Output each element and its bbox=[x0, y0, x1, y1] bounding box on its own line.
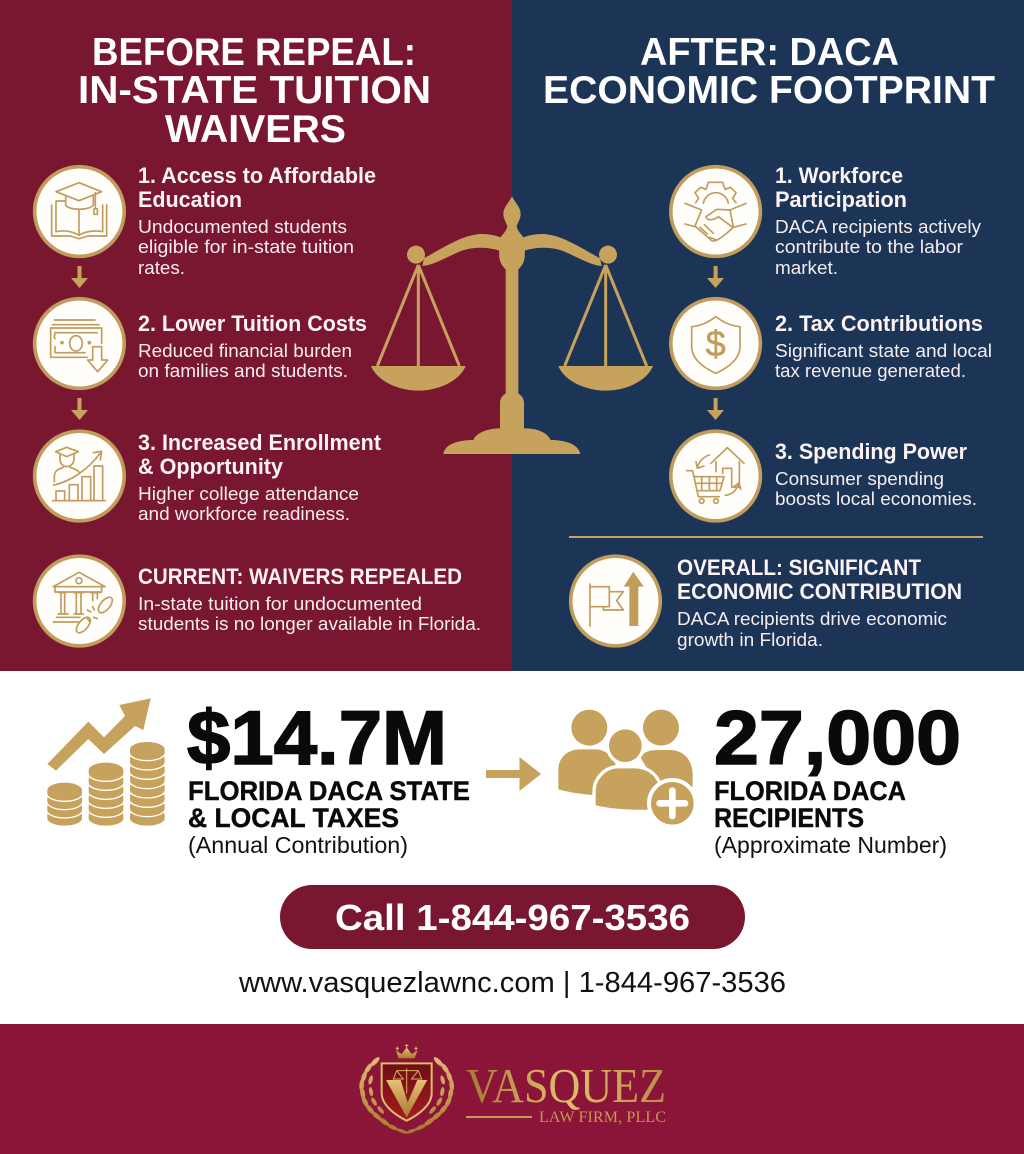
text: tax contributions: 2. Tax Contributions bbox=[775, 311, 983, 336]
text: access to affordable education: eligible for in-state tuition bbox=[138, 237, 354, 257]
text: spending power: 3. Spending Power bbox=[775, 439, 967, 464]
stat: tax contribution bbox=[187, 696, 470, 858]
text: current waivers repealed: CURRENT: WAIVERS REPEALED bbox=[138, 564, 462, 589]
text: access to affordable education: Education bbox=[138, 187, 242, 212]
text: lower tuition costs bbox=[138, 311, 367, 381]
text: tax contributions: Significant state and local bbox=[775, 341, 992, 361]
icon: group of people with plus bbox=[558, 710, 696, 827]
arrow: down bbox=[71, 398, 88, 420]
text: workforce participation: contribute to the labor bbox=[775, 237, 963, 257]
icon: shield with dollar: $ bbox=[706, 323, 726, 364]
text: increased enrollment and opportunity: Higher college attendance bbox=[138, 484, 359, 504]
text: overall economic contribution: growth in Florida. bbox=[677, 630, 823, 650]
text: lower tuition costs: 2. Lower Tuition Costs bbox=[138, 311, 367, 336]
stat: tax contribution: FLORIDA DACA STATE bbox=[188, 776, 470, 806]
stat: tax contribution: & LOCAL TAXES bbox=[188, 803, 399, 833]
text: increased enrollment and opportunity: 3. Increased Enrollment bbox=[138, 430, 382, 455]
icon: courthouse and broken chain bbox=[35, 556, 124, 646]
text: spending power: Consumer spending bbox=[775, 469, 944, 489]
stat: tax contribution: (Annual Contribution) bbox=[188, 832, 408, 858]
text: overall economic contribution: ECONOMIC CONTRIBUTION bbox=[677, 579, 962, 604]
heading: before repeal: IN-STATE TUITION bbox=[78, 69, 431, 112]
text: tax contributions bbox=[775, 311, 992, 381]
logo: Vasquez Law Firm bbox=[359, 1044, 666, 1135]
icon: scales of justice bbox=[371, 196, 653, 454]
panel: footer bbox=[0, 1024, 1024, 1154]
text: lower tuition costs: on families and students. bbox=[138, 361, 348, 381]
icon: shield with dollar bbox=[671, 299, 760, 388]
text: overall economic contribution bbox=[677, 555, 962, 650]
stat: recipients: RECIPIENTS bbox=[714, 803, 864, 833]
icon: coin stacks with rising arrow bbox=[47, 698, 165, 826]
panel: before repeal bbox=[0, 0, 512, 671]
heading: before repeal bbox=[78, 31, 431, 151]
text: workforce participation: DACA recipients actively bbox=[775, 217, 981, 237]
button: call bbox=[280, 885, 745, 949]
text: workforce participation: Participation bbox=[775, 187, 907, 212]
text: increased enrollment and opportunity: and workforce readiness. bbox=[138, 504, 350, 524]
arrow: down bbox=[707, 266, 724, 288]
arrow: down bbox=[707, 398, 724, 420]
contact line: www.vasquezlawnc.com | 1-844-967-3536 bbox=[238, 967, 786, 999]
text: current waivers repealed bbox=[138, 564, 481, 634]
arrow: right bbox=[486, 757, 541, 791]
text: workforce participation: market. bbox=[775, 258, 838, 278]
text: access to affordable education: 1. Access to Affordable bbox=[138, 163, 376, 188]
panel: statistics bbox=[0, 671, 1024, 1024]
heading: before repeal: BEFORE REPEAL: bbox=[92, 31, 416, 74]
text: spending power: boosts local economies. bbox=[775, 489, 977, 509]
text: access to affordable education: Undocumented students bbox=[138, 217, 347, 237]
text: spending power bbox=[775, 439, 977, 509]
icon: shopping cart and house bbox=[671, 431, 760, 521]
text: workforce participation: 1. Workforce bbox=[775, 163, 903, 188]
logo: Vasquez Law Firm: VASQUEZ bbox=[466, 1058, 666, 1113]
arrow: down bbox=[71, 266, 88, 288]
text: lower tuition costs: Reduced financial burden bbox=[138, 341, 352, 361]
text: overall economic contribution: DACA recipients drive economic bbox=[677, 609, 947, 629]
stat: recipients: FLORIDA DACA bbox=[714, 776, 906, 806]
text: current waivers repealed: In-state tuition for undocumented bbox=[138, 594, 422, 614]
stat: recipients: (Approximate Number) bbox=[714, 832, 947, 858]
text: current waivers repealed: students is no longer available in Florida. bbox=[138, 614, 481, 634]
text: overall economic contribution: OVERALL: SIGNIFICANT bbox=[677, 555, 922, 580]
icon: graduation cap on book bbox=[35, 167, 124, 256]
text: tax contributions: tax revenue generated. bbox=[775, 361, 966, 381]
heading: before repeal: WAIVERS bbox=[165, 108, 346, 151]
icon: money with down arrow bbox=[35, 299, 124, 388]
logo: Vasquez Law Firm: LAW FIRM, PLLC bbox=[539, 1109, 666, 1126]
stat: recipients bbox=[714, 696, 961, 858]
stat: recipients: 27,000 bbox=[714, 696, 961, 781]
icon: gear and handshake bbox=[671, 167, 760, 256]
text: access to affordable education: rates. bbox=[138, 258, 185, 278]
text: workforce participation bbox=[775, 163, 981, 278]
icon: graduate and growth chart bbox=[35, 431, 124, 521]
panel: after DACA bbox=[512, 0, 1024, 671]
heading: after DACA bbox=[543, 31, 995, 112]
heading: after DACA: AFTER: DACA bbox=[640, 31, 899, 74]
text: access to affordable education bbox=[138, 163, 376, 278]
icon: flag and up arrow bbox=[571, 556, 660, 646]
stat: tax contribution: $14.7M bbox=[187, 696, 447, 781]
text: increased enrollment and opportunity: & Opportunity bbox=[138, 454, 284, 479]
heading: after DACA: ECONOMIC FOOTPRINT bbox=[543, 69, 995, 112]
button: call: Call 1-844-967-3536 bbox=[335, 897, 690, 938]
text: increased enrollment and opportunity bbox=[138, 430, 382, 524]
